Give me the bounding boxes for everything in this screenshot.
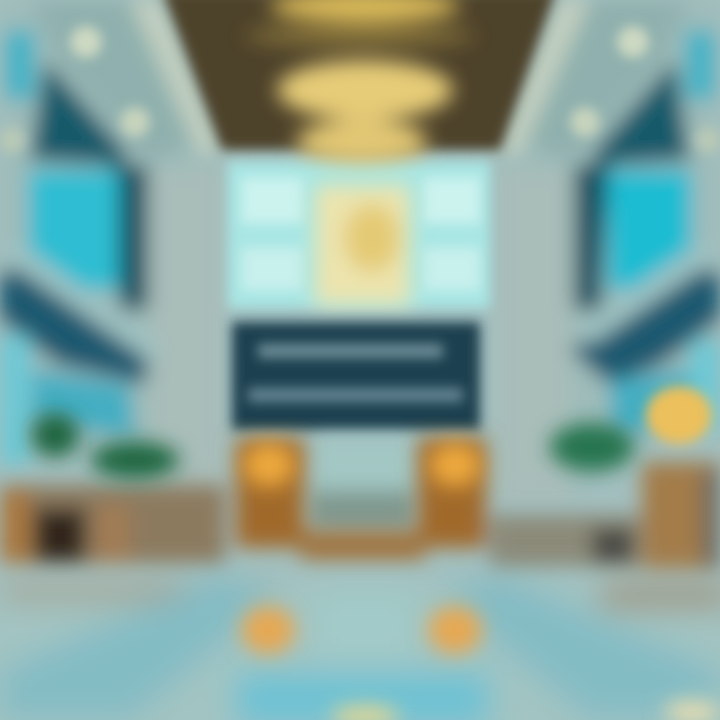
icon: chandelier [245,0,475,164]
icons: potted plants [31,413,634,478]
icon: right floor lamp [646,386,712,444]
sign blurred lettering [248,344,463,402]
icons: amber wall lights [243,443,481,487]
window golden glow [315,185,410,305]
panel: dark sign [232,322,480,430]
wood band [0,438,720,572]
central ceiling [162,0,556,150]
icons: left ceiling lights [0,26,150,153]
panel: right ceiling and wall [495,0,720,500]
icons: floor reflections of lights [241,606,720,720]
icons: right ceiling lights [570,26,720,153]
panel: reflective floor [0,575,720,720]
panel: lower lobby wall [310,440,415,530]
panel: central window [228,162,490,308]
panel: left ceiling and wall [0,0,225,500]
